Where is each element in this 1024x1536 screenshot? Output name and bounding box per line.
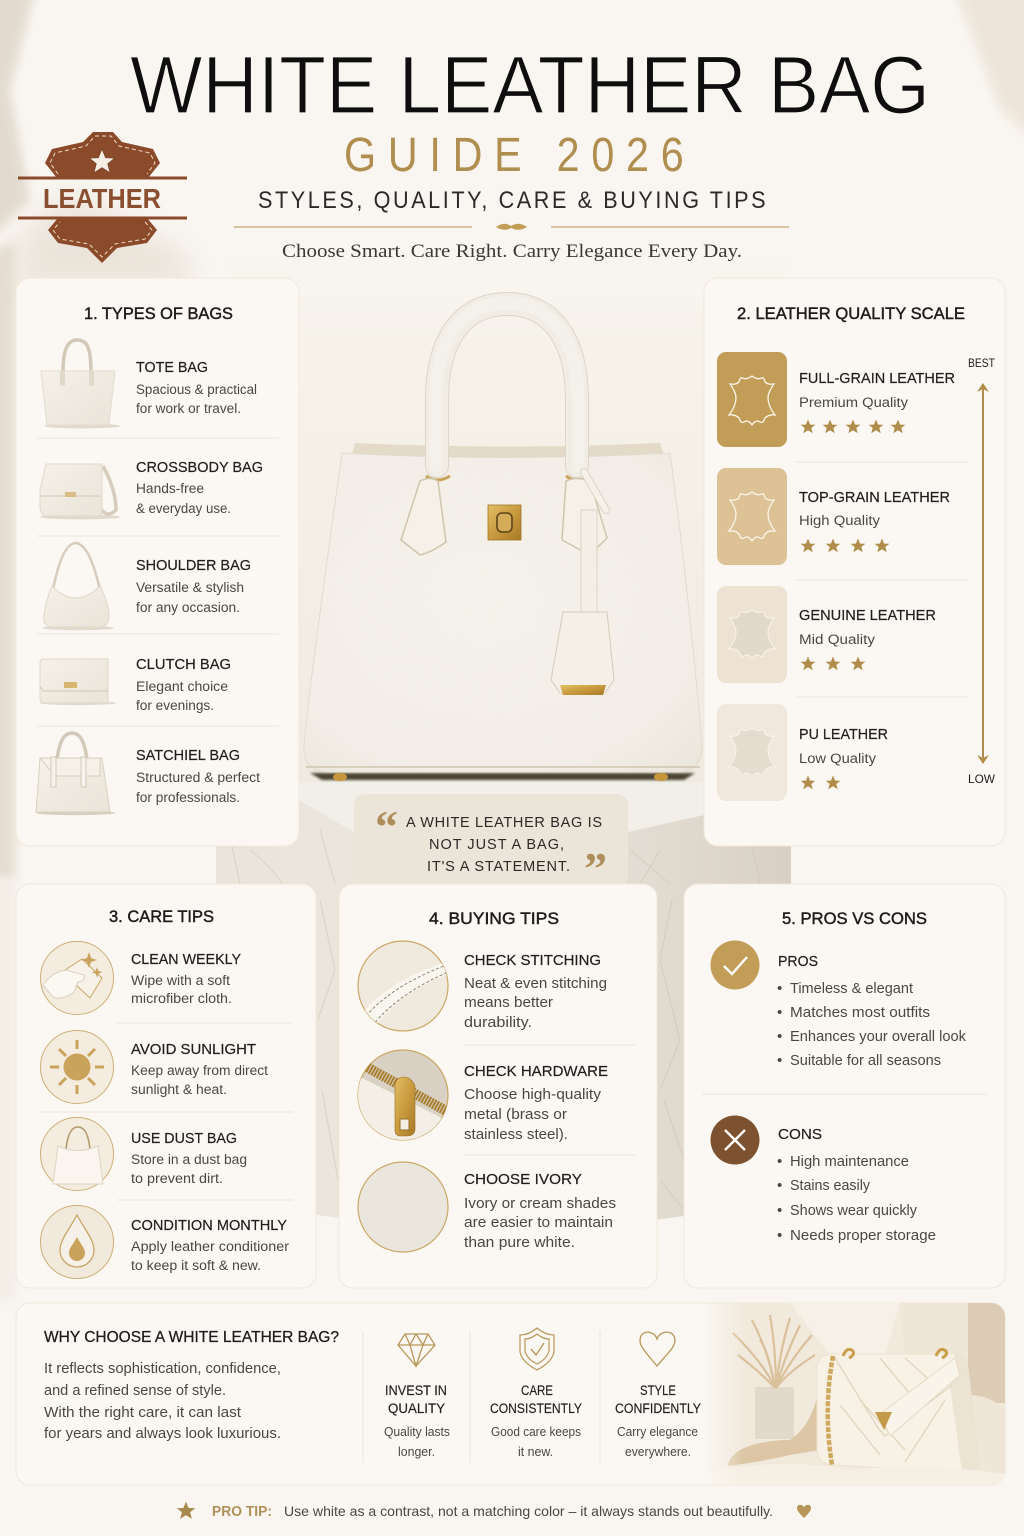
row: condition monthly (40, 1206, 290, 1278)
cons list: CONS (778, 1126, 822, 1143)
leather badge (18, 132, 187, 263)
pros list: Enhances your overall look (790, 1028, 966, 1045)
item: invest in quality: longer. (398, 1445, 435, 1459)
item: care consistently: CONSISTENTLY (490, 1401, 582, 1416)
panel: pros vs cons (684, 884, 1005, 1288)
cons list (710, 1116, 936, 1244)
pros list: • (777, 1004, 782, 1021)
row: tote bag: TOTE BAG (136, 359, 208, 376)
row: check stitching: means better (464, 994, 553, 1011)
row: check stitching: Neat & even stitching (464, 975, 607, 992)
item: invest in quality: Quality lasts (384, 1425, 450, 1439)
title: WHITE LEATHER BAG (130, 40, 930, 131)
row: use dust bag (40, 1118, 247, 1190)
row: genuine leather (717, 586, 936, 683)
row: shoulder bag: for any occasion. (136, 600, 240, 615)
row: avoid sunlight: sunlight & heat. (131, 1082, 227, 1097)
row: check hardware: CHECK HARDWARE (464, 1063, 608, 1080)
row: condition monthly: to keep it soft & new. (131, 1258, 261, 1273)
row: crossbody bag: & everyday use. (136, 501, 231, 516)
heading: buying tips: 4. BUYING TIPS (429, 909, 559, 928)
panel: leather quality scale (704, 278, 1005, 846)
row: clutch bag (40, 656, 231, 713)
cons list: • (777, 1227, 782, 1244)
row: clutch bag: for evenings. (136, 698, 214, 713)
row: shoulder bag: SHOULDER BAG (136, 557, 251, 574)
subtitle: guide 2026: GUIDE 2026 (344, 128, 684, 182)
row: clean weekly: CLEAN WEEKLY (131, 951, 241, 968)
row: choose ivory: Ivory or cream shades (464, 1195, 616, 1212)
panel: buying tips (339, 884, 657, 1288)
row: check hardware (358, 1050, 608, 1145)
panel: why choose (16, 1303, 1006, 1486)
row: pu leather (717, 704, 888, 801)
pros list: Suitable for all seasons (790, 1052, 941, 1069)
quote box: IT'S A STATEMENT. (427, 859, 570, 875)
row: condition monthly: Apply leather conditioner (131, 1239, 290, 1254)
row: choose ivory (358, 1162, 616, 1252)
row: avoid sunlight: AVOID SUNLIGHT (131, 1041, 256, 1058)
row: clutch bag: Elegant choice (136, 679, 228, 694)
pro tip footer (177, 1502, 811, 1520)
pro tip footer: PRO TIP: (212, 1504, 272, 1520)
row: avoid sunlight: Keep away from direct (131, 1063, 268, 1078)
row: tote bag: for work or travel. (136, 401, 241, 416)
why choose text (44, 1329, 339, 1442)
row: satchiel bag (36, 733, 260, 815)
why choose text: and a refined sense of style. (44, 1382, 226, 1399)
why choose text: With the right care, it can last (44, 1404, 242, 1421)
quote box: NOT JUST A BAG, (429, 837, 564, 853)
cons list: • (777, 1177, 782, 1194)
pros list: Timeless & elegant (790, 980, 914, 997)
quality arrow: LOW (968, 774, 995, 786)
heading: pros vs cons: 5. PROS VS CONS (782, 909, 927, 928)
row: avoid sunlight (40, 1030, 268, 1104)
marble pedestal (216, 782, 791, 1228)
row: top-grain leather: High Quality (799, 513, 880, 528)
why choose text: for years and always look luxurious. (44, 1425, 281, 1442)
row: check stitching: durability. (464, 1014, 532, 1031)
row: crossbody bag (40, 459, 263, 520)
panel: care tips (16, 884, 316, 1288)
why choose text: It reflects sophistication, confidence, (44, 1360, 281, 1377)
item: care consistently: CARE (521, 1383, 553, 1398)
row: genuine leather: GENUINE LEATHER (799, 607, 936, 624)
pros list (710, 940, 966, 1069)
row: satchiel bag: Structured & perfect (136, 770, 260, 785)
item: care consistently: Good care keeps (491, 1425, 581, 1439)
row: shoulder bag (42, 543, 251, 630)
cons list: Shows wear quickly (790, 1202, 917, 1219)
row: use dust bag: to prevent dirt. (131, 1171, 223, 1186)
item: style confidently (615, 1332, 701, 1459)
leather badge: LEATHER (43, 183, 161, 214)
row: satchiel bag: for professionals. (136, 790, 240, 805)
row: tote bag (41, 340, 257, 428)
row: use dust bag: USE DUST BAG (131, 1130, 237, 1147)
ornament divider (234, 224, 789, 230)
row: satchiel bag: SATCHIEL BAG (136, 747, 240, 764)
row: check hardware: Choose high-quality (464, 1086, 602, 1103)
quote box: ” (584, 843, 607, 894)
item: care consistently (490, 1328, 582, 1459)
item: style confidently: STYLE (640, 1383, 676, 1398)
item: invest in quality: QUALITY (388, 1401, 445, 1416)
row: crossbody bag: CROSSBODY BAG (136, 459, 263, 476)
row: tote bag: Spacious & practical (136, 382, 257, 397)
pros list: • (777, 1052, 782, 1069)
row: crossbody bag: Hands-free (136, 481, 204, 496)
row: choose ivory: are easier to maintain (464, 1214, 613, 1231)
cons list: Stains easily (790, 1177, 870, 1194)
photo: quilted bag on fabric (700, 1303, 1006, 1486)
row: clean weekly: Wipe with a soft (131, 973, 230, 988)
cons list: • (777, 1153, 782, 1170)
quote box: “ (375, 801, 398, 852)
row: clutch bag: CLUTCH BAG (136, 656, 231, 673)
cons list: Needs proper storage (790, 1227, 936, 1244)
tagline: Choose Smart. Care Right. Carry Elegance Every Day. (282, 241, 742, 262)
quote box: A WHITE LEATHER BAG IS (406, 815, 602, 831)
row: clean weekly: microfiber cloth. (131, 991, 232, 1006)
quality arrow (968, 358, 995, 786)
quality arrow: BEST (968, 358, 995, 370)
item: invest in quality: INVEST IN (385, 1383, 447, 1398)
item: style confidently: CONFIDENTLY (615, 1401, 701, 1416)
pros list: • (777, 1028, 782, 1045)
heading: types of bags: 1. TYPES OF BAGS (84, 304, 233, 323)
row: check hardware: stainless steel). (464, 1126, 568, 1143)
row: pu leather: PU LEATHER (799, 726, 888, 743)
heading: leather quality scale: 2. LEATHER QUALITY SCALE (737, 304, 965, 323)
pros list: Matches most outfits (790, 1004, 930, 1021)
row: pu leather: Low Quality (799, 751, 876, 766)
row: use dust bag: Store in a dust bag (131, 1152, 247, 1167)
main white handbag (304, 303, 702, 781)
row: shoulder bag: Versatile & stylish (136, 580, 244, 595)
pros list: PROS (778, 953, 818, 970)
row: check stitching (358, 941, 607, 1031)
quote box (354, 794, 628, 894)
item: invest in quality (384, 1334, 450, 1459)
row: clean weekly (40, 942, 241, 1014)
panel: types of bags (16, 278, 299, 846)
row: full-grain leather (717, 352, 955, 447)
cons list: • (777, 1202, 782, 1219)
why choose text: WHY CHOOSE A WHITE LEATHER BAG? (44, 1329, 339, 1346)
heading: care tips: 3. CARE TIPS (109, 907, 214, 926)
item: care consistently: it new. (518, 1445, 553, 1459)
row: choose ivory: than pure white. (464, 1234, 575, 1251)
pros list: • (777, 980, 782, 997)
row: choose ivory: CHOOSE IVORY (464, 1171, 582, 1188)
row: genuine leather: Mid Quality (799, 632, 875, 647)
subheading: STYLES, QUALITY, CARE & BUYING TIPS (258, 186, 766, 213)
row: full-grain leather: Premium Quality (799, 395, 908, 410)
row: top-grain leather (717, 468, 950, 565)
item: style confidently: Carry elegance (617, 1425, 698, 1439)
row: top-grain leather: TOP-GRAIN LEATHER (799, 489, 950, 506)
item: style confidently: everywhere. (625, 1445, 691, 1459)
row: condition monthly: CONDITION MONTHLY (131, 1217, 287, 1234)
row: check stitching: CHECK STITCHING (464, 952, 601, 969)
cons list: High maintenance (790, 1153, 909, 1170)
pro tip footer: Use white as a contrast, not a matching color – it always stands out beautifully. (284, 1503, 773, 1519)
row: check hardware: metal (brass or (464, 1106, 567, 1123)
row: full-grain leather: FULL-GRAIN LEATHER (799, 370, 955, 387)
